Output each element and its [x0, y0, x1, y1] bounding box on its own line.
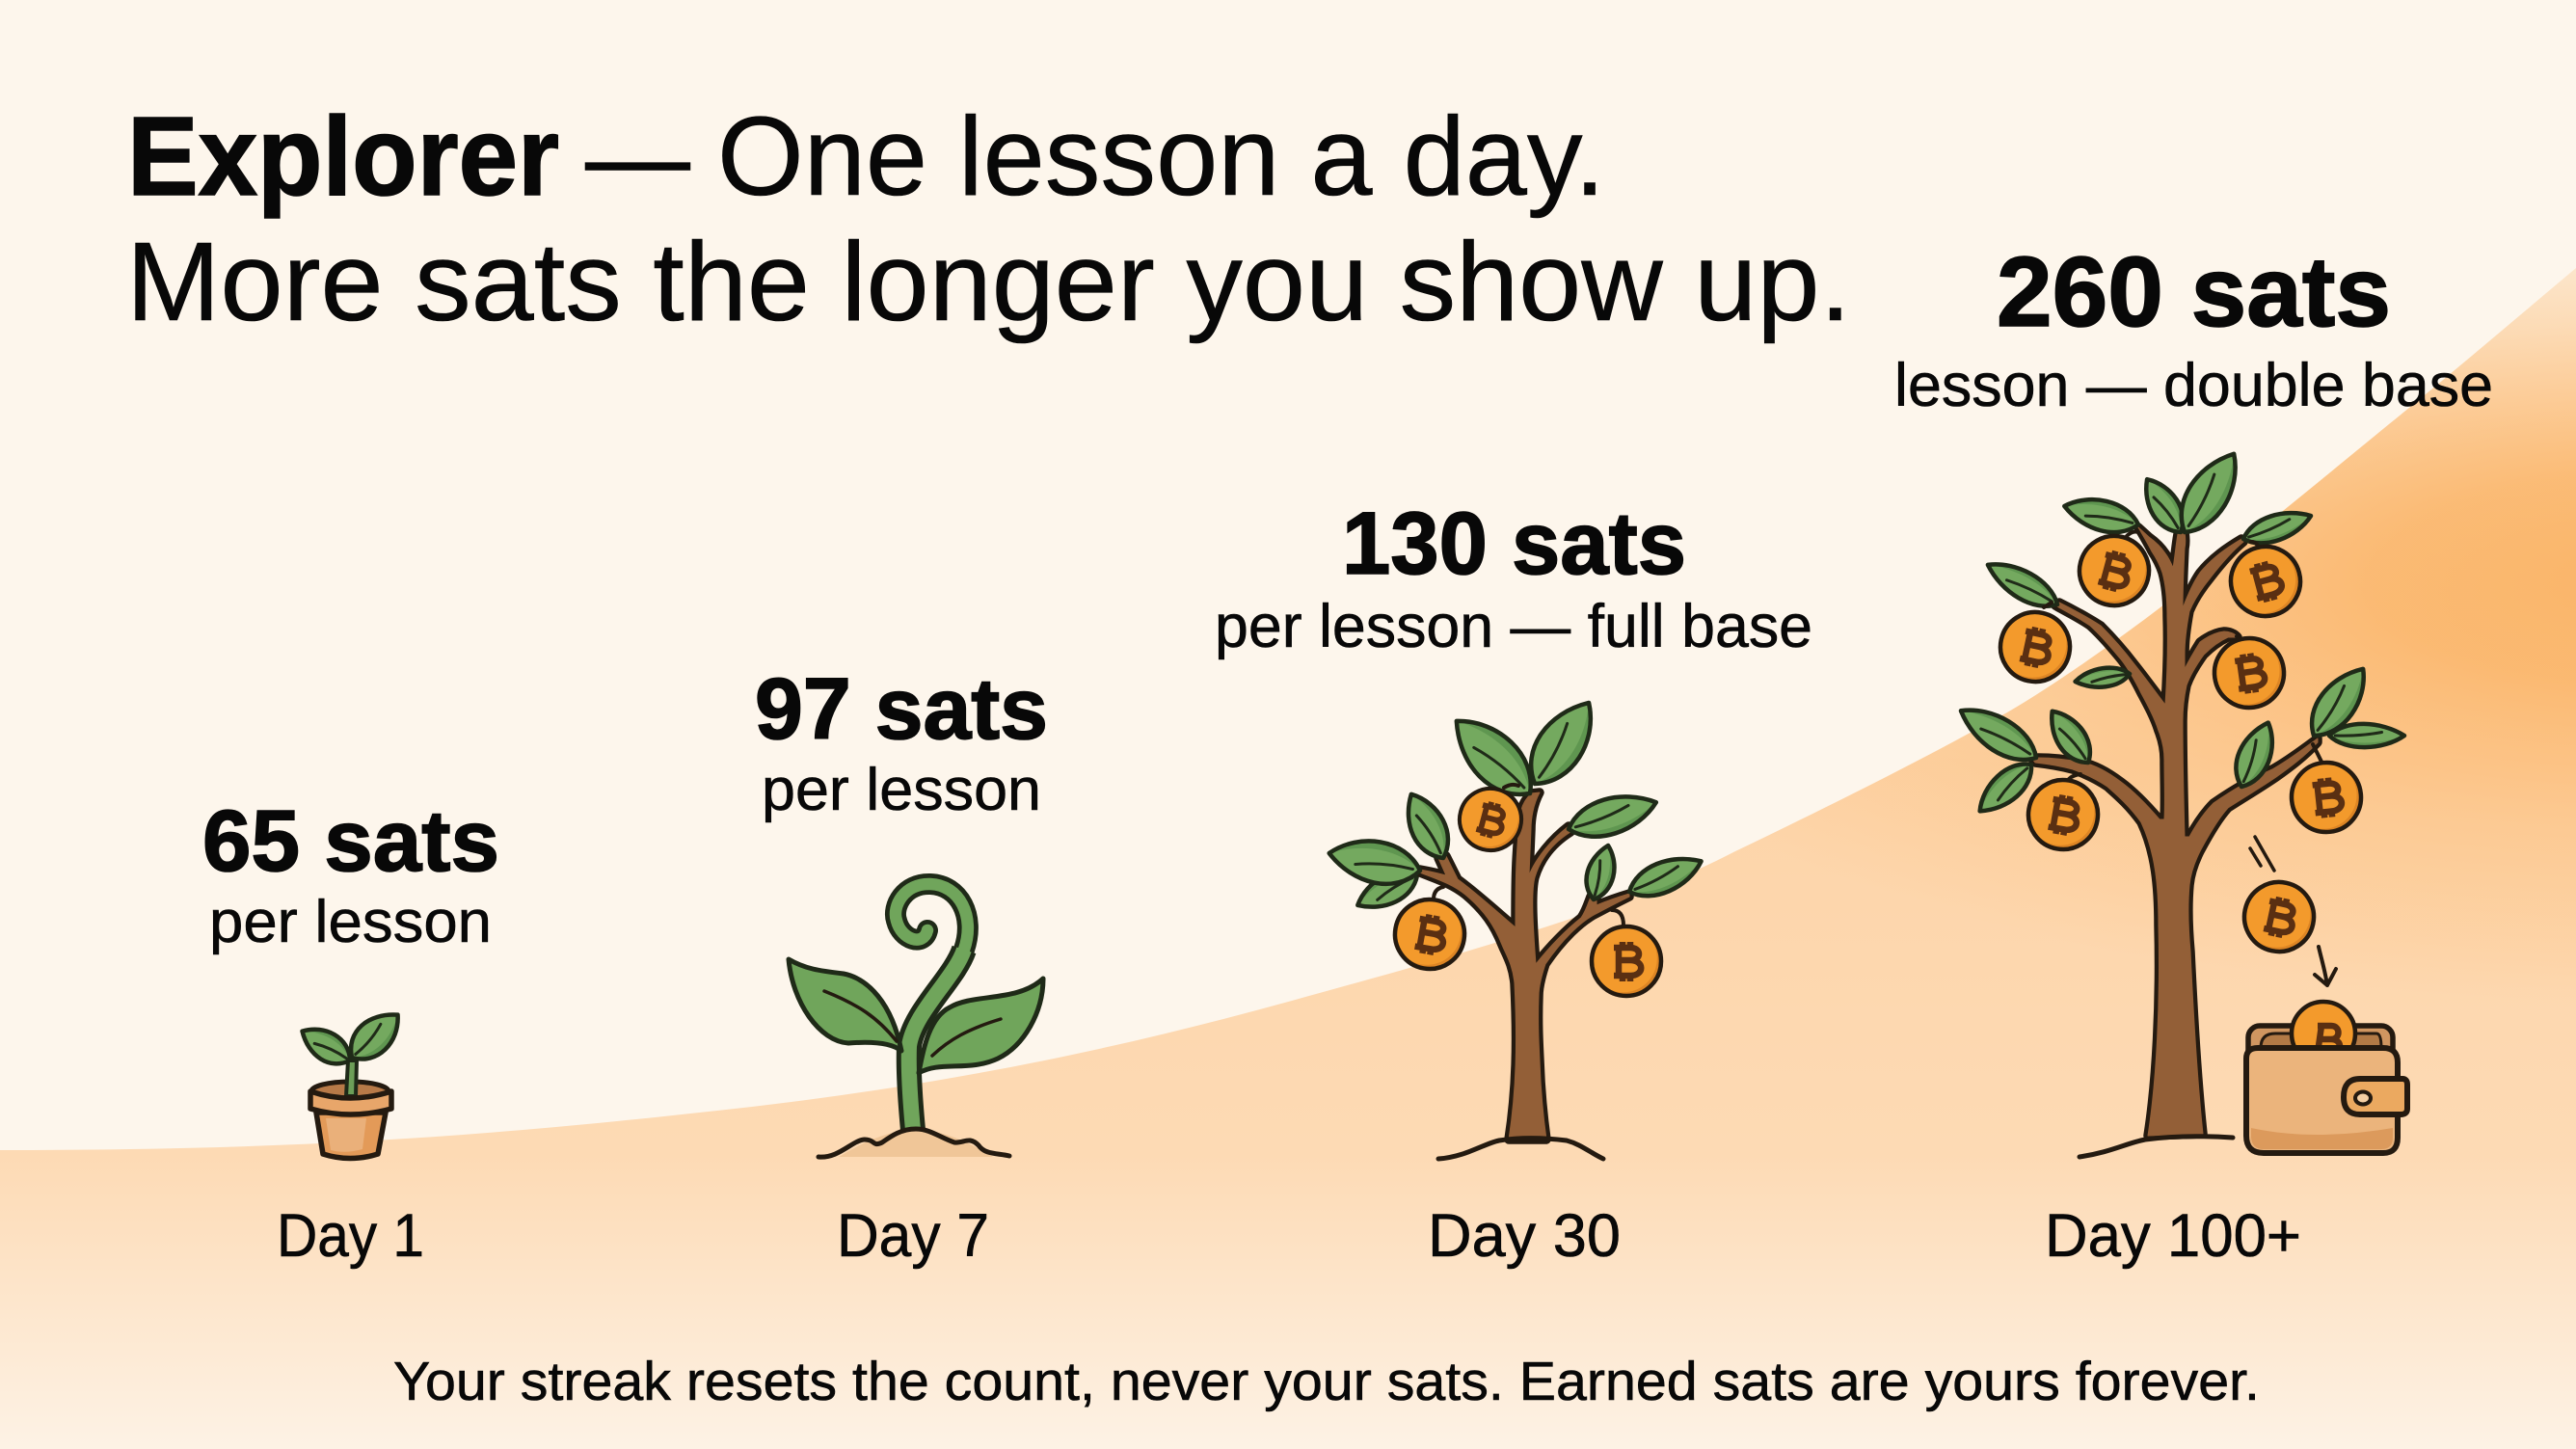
reward: 260 sats: 260 sats	[1997, 236, 2391, 347]
icon: wallet with coin	[2246, 1002, 2407, 1153]
title: —	[585, 94, 690, 219]
stage: Day 30	[1215, 495, 1812, 1270]
title: One lesson a day.	[717, 94, 1605, 219]
stage: Day 7	[755, 661, 1048, 1270]
title: More sats the longer you show up.	[126, 219, 1851, 344]
reward: 65 sats: 65 sats	[202, 793, 499, 890]
stage: Day 1	[202, 793, 499, 1270]
ground line	[2080, 1137, 2233, 1157]
icon: falling coin with motion lines	[2238, 837, 2336, 985]
title	[126, 94, 1851, 344]
stage: Day 100+	[1894, 236, 2493, 1270]
footer note: Your streak resets the count, never your sats. Earned sats are yours forever.	[393, 1351, 2260, 1412]
icon: young tree with three coins	[1326, 690, 1707, 1159]
reward: 130 sats: 130 sats	[1342, 495, 1686, 593]
reward: 97 sats: 97 sats	[755, 661, 1048, 758]
caption: per lesson: per lesson	[209, 889, 492, 955]
caption: per lesson: per lesson	[762, 757, 1041, 823]
icon: curled seedling	[789, 884, 1043, 1157]
caption: lesson, double base: lesson — double base	[1894, 352, 2493, 419]
label: Day 30: Day 30	[1428, 1202, 1621, 1270]
icon: mature tree with coins	[1952, 443, 2404, 1157]
label: Day 7: Day 7	[837, 1202, 989, 1270]
icon: sprout in pot	[295, 1003, 409, 1159]
label: Day 1: Day 1	[277, 1202, 424, 1270]
label: Day 100+: Day 100+	[2045, 1202, 2301, 1270]
caption: per lesson, full base: per lesson — full base	[1215, 593, 1812, 660]
title: Explorer	[127, 94, 559, 219]
